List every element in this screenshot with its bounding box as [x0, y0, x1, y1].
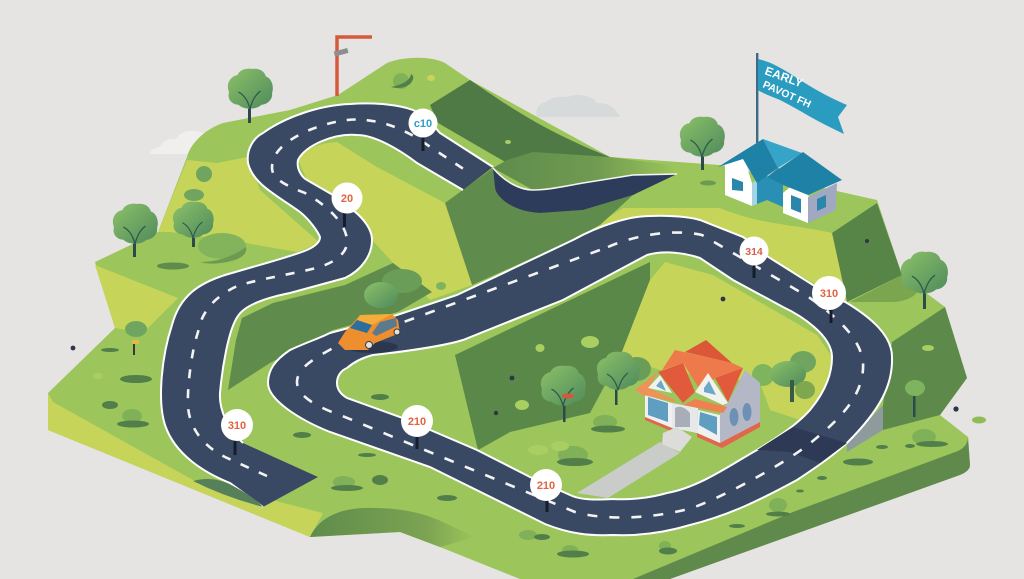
tree: right ledge [901, 252, 948, 309]
marker: 310 right: 310 [820, 288, 838, 300]
marker: 20: 20 [341, 193, 353, 205]
terrain: centre wedge [455, 262, 650, 450]
terrain: right upper cliff [832, 203, 902, 302]
marker: 210 bottom: 210 [537, 480, 555, 492]
road: end shadow mound [193, 479, 263, 507]
walkway [577, 442, 680, 498]
terrain: right lower cliff [883, 307, 967, 430]
marker: 314: 314 [745, 246, 763, 258]
terrain: yellow hill inside hairpin [298, 142, 472, 300]
car [338, 314, 400, 353]
marker: top c10: c10 [414, 118, 432, 130]
marker: 20 [332, 182, 362, 227]
marker: 310 right [812, 276, 846, 323]
tree: left plateau second [173, 189, 214, 247]
terrain: front left edge [48, 393, 323, 537]
flag: EARLY [763, 64, 805, 90]
terrain: centre cliff [445, 168, 633, 285]
road: main loop [268, 216, 892, 535]
terrain: top dark slope [430, 80, 610, 172]
tree: left plateau [113, 204, 158, 257]
blue house [718, 139, 842, 223]
marker: top c10 [408, 108, 438, 151]
road: detached swoop [493, 168, 677, 213]
tree: right lower small [905, 380, 925, 417]
marker: 210 mid [401, 405, 433, 449]
terrain: left slope yellow [158, 157, 320, 252]
terrain: dark wedge left [228, 263, 432, 390]
orange house [635, 340, 760, 452]
bushes near car [364, 269, 446, 308]
bush: left slope [196, 166, 212, 182]
marker: 310 left [221, 409, 253, 455]
cloud: left [150, 131, 206, 154]
terrain: front right edge [633, 437, 970, 579]
marker: 210 bottom [530, 469, 562, 512]
cloud: centre [536, 95, 620, 117]
flag [756, 53, 847, 143]
road: upper serpentine [161, 103, 493, 507]
road: swoop edge [493, 168, 677, 190]
tree group: right of orange house [752, 351, 816, 402]
terrain: yellow strip under plateau [585, 208, 847, 302]
terrain: inner yellow field [620, 262, 832, 420]
terrain: concrete road side [847, 405, 883, 452]
tree: top left [228, 69, 273, 123]
terrain: band above swoop [493, 152, 677, 190]
terrain: ledge shade [850, 275, 917, 302]
ground mounds [71, 73, 986, 558]
marker: 210 mid: 210 [408, 416, 426, 428]
street lamp [334, 37, 372, 96]
bush: left plateau mound [157, 233, 246, 270]
tree: left of orange house [597, 352, 651, 405]
tree: left small with sign [125, 321, 147, 355]
terrain: front dark hump [310, 508, 475, 547]
terrain: strip beside upper road [438, 123, 505, 168]
terrain: left cliff yellow [95, 265, 178, 333]
tree: centre wedge [541, 366, 586, 422]
marker: 310 left: 310 [228, 420, 246, 432]
tree: behind blue house [680, 117, 725, 186]
flag: PAVOT FH [761, 79, 813, 111]
marker: 314 [740, 236, 768, 278]
